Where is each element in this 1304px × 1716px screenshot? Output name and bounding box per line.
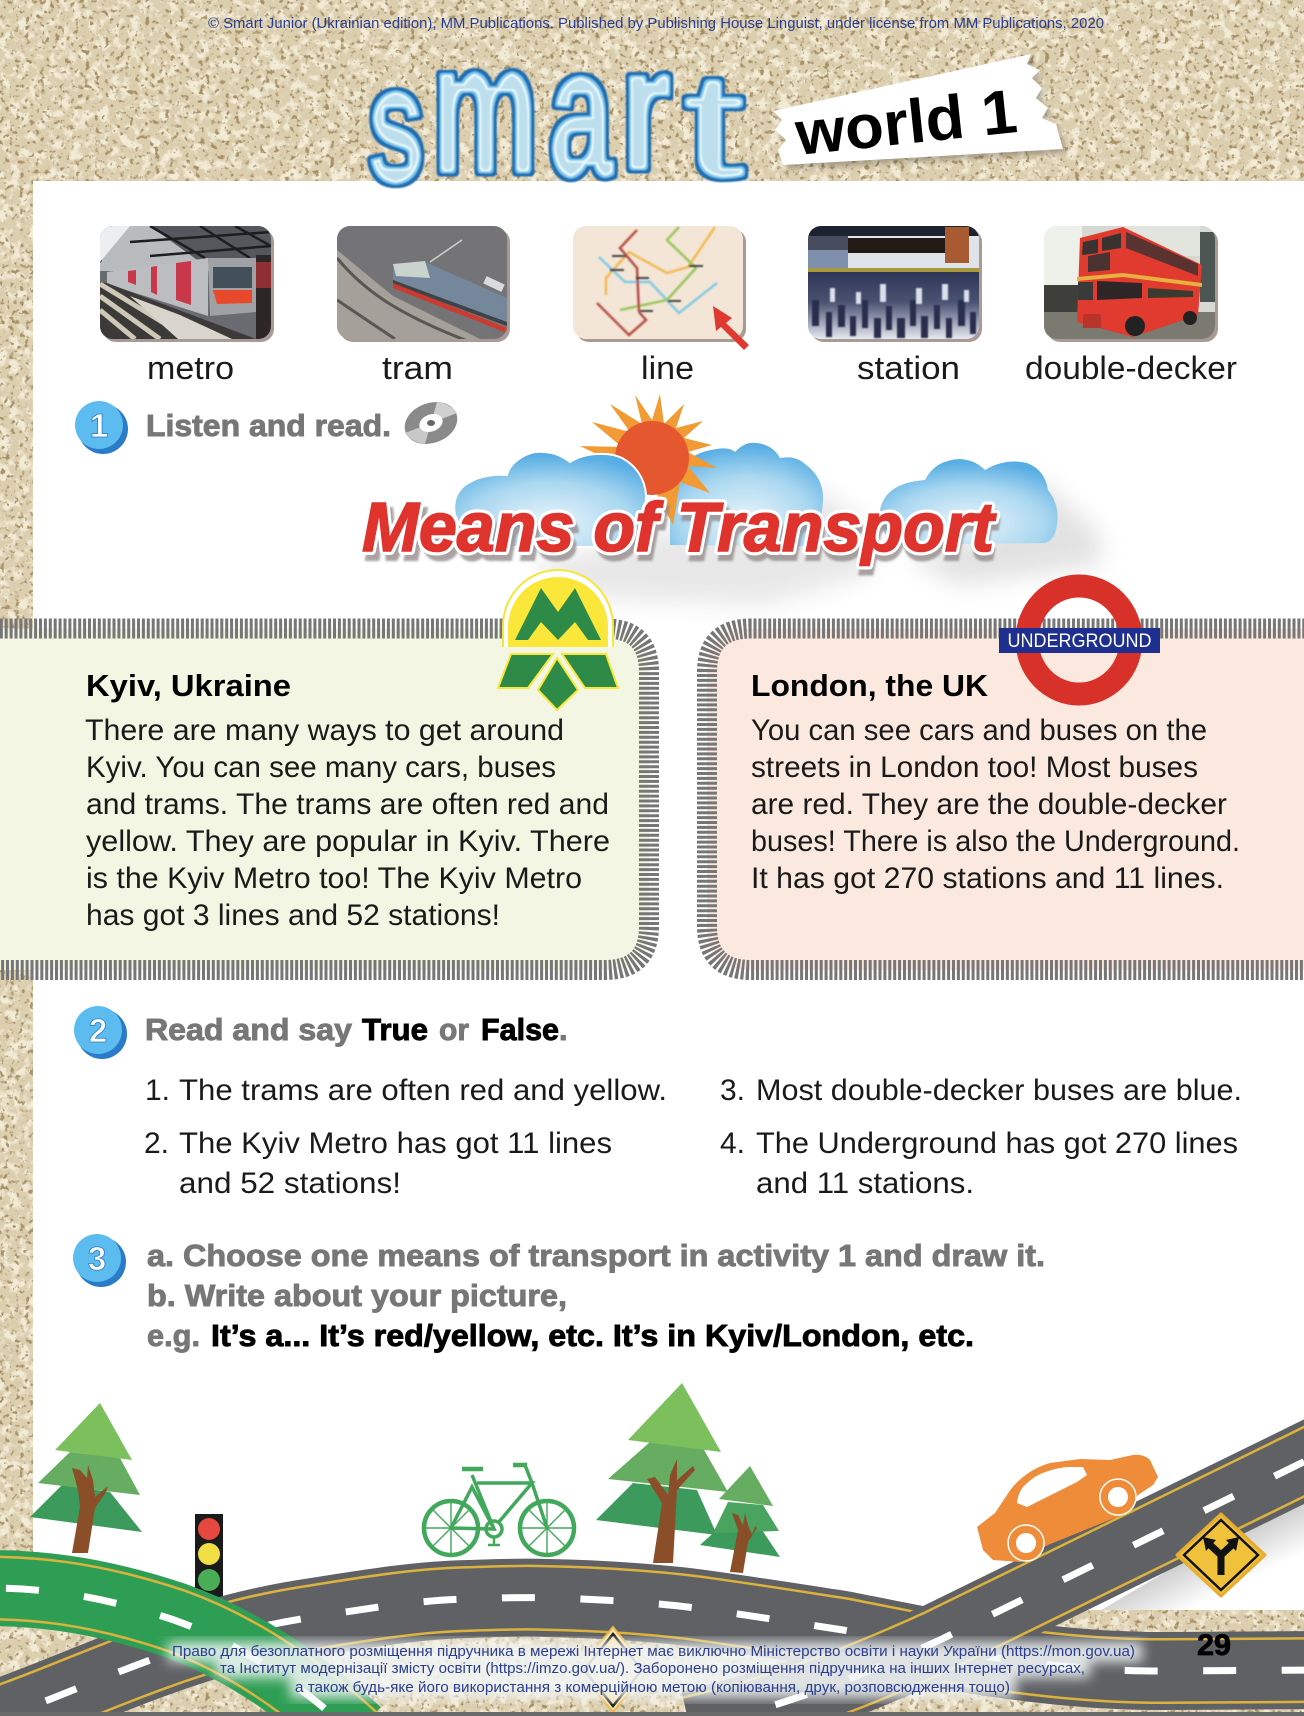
tree: centre — [596, 1383, 728, 1563]
activity 3 instructions: It’s a... It’s red/yellow, etc. It’s in Kyiv/London, etc. — [211, 1318, 974, 1353]
activity 1 instruction: Listen and read. — [146, 408, 391, 443]
true or false statements: The Kyiv Metro has got 11 lines — [179, 1127, 612, 1160]
copyright line: © Smart Junior (Ukrainian edition), MM Publications. Published by Publishing House Linguist, under license from MM Publications, 2020 — [208, 15, 1104, 32]
Kyiv body text — [85, 714, 610, 932]
icon: junction road sign — [1177, 1514, 1265, 1596]
sun rays — [580, 394, 717, 525]
activity 1 badge — [75, 401, 128, 454]
picture card: double-decker — [1044, 226, 1218, 342]
icon: bicycle — [424, 1465, 574, 1555]
activity 2 instruction — [145, 1012, 568, 1047]
bottom bar — [0, 1712, 1304, 1716]
activity 3 badge — [73, 1234, 126, 1287]
title: Means of Transport — [367, 495, 998, 573]
cloud: left — [454, 452, 646, 547]
picture card: line map with red arrow — [573, 226, 749, 350]
cork strip beneath the roads — [0, 1610, 1304, 1714]
tree: small — [700, 1466, 780, 1573]
true or false statements: and 11 stations. — [756, 1167, 974, 1200]
panel: Kyiv, Ukraine — [0, 628, 649, 970]
London heading: London, the UK — [751, 668, 989, 703]
road: grey diagonal — [690, 1449, 1304, 1716]
Kyiv body text: yellow. They are popular in Kyiv. There — [86, 825, 610, 858]
Kyiv body text: Kyiv. You can see many cars, buses — [86, 751, 556, 784]
logo: smart: s — [366, 30, 426, 218]
tree: left — [30, 1403, 142, 1553]
picture labels: station — [857, 350, 960, 386]
road: green — [0, 1588, 355, 1716]
true or false statements: The trams are often red and yellow. — [179, 1074, 667, 1107]
London body text: streets in London too! Most buses — [751, 751, 1198, 784]
page number: 29 — [1197, 1629, 1231, 1662]
copyright notice: Право для безоплатного розміщення підручника в мережі Інтернет має виключно Міністерство освіти і науки України (https://mon.gov.ua) — [172, 1643, 1135, 1660]
picture labels: tram — [382, 350, 453, 386]
true or false statements: 3. — [720, 1074, 745, 1107]
true or false statements: 2. — [144, 1127, 169, 1160]
heading illustration: sun and clouds — [454, 394, 1100, 605]
logo: smart: m — [431, 6, 539, 212]
icon: London Underground roundel: UNDERGROUND — [1008, 631, 1152, 652]
activity 3 instructions: a. Choose one means of transport in activity 1 and draw it. — [147, 1238, 1045, 1273]
activity 2 instruction: . — [559, 1012, 568, 1047]
London body text — [751, 714, 1240, 895]
cloud: middle — [670, 443, 823, 546]
icon: London Underground roundel — [999, 586, 1160, 694]
true or false statements: and 52 stations! — [179, 1167, 401, 1200]
road: grey hill — [0, 1598, 1304, 1716]
activity 2 instruction: False — [481, 1012, 559, 1047]
London body text: are red. They are the double-decker — [751, 788, 1227, 821]
activity 3 badge: 3 — [88, 1240, 106, 1277]
logo: smart: a — [548, 10, 615, 216]
true or false statements: 4. — [720, 1127, 745, 1160]
London body text: buses! There is also the Underground. — [751, 825, 1240, 858]
activity 3 instructions — [147, 1238, 1045, 1353]
copyright notice: а також будь-яке його використання з комерційною метою (копіювання, друк, розповсюдження тощо) — [295, 1679, 1010, 1696]
logo: smart: r — [620, 12, 672, 207]
icon: CD — [399, 395, 463, 451]
cloud: right — [880, 459, 1058, 545]
activity 2 badge: 2 — [89, 1012, 107, 1049]
true or false statements: The Underground has got 270 lines — [756, 1127, 1238, 1160]
picture labels: metro — [147, 350, 234, 386]
picture card: metro — [100, 226, 274, 342]
logo: smart — [366, 6, 744, 218]
activity 2 instruction: or — [439, 1012, 469, 1047]
activity 2 badge — [74, 1006, 127, 1059]
shadow below right road — [1098, 1490, 1304, 1612]
icon: lower road sign — [578, 1627, 648, 1712]
activity 2 instruction: True — [362, 1012, 428, 1047]
activity 2 instruction: Read and say — [145, 1012, 353, 1047]
sun disc — [615, 421, 689, 495]
logo: smart: t — [684, 41, 744, 209]
picture card: tram — [337, 226, 510, 342]
activity 1 badge: 1 — [90, 407, 108, 444]
activity 3 instructions: b. Write about your picture, — [147, 1278, 567, 1313]
true or false statements: Most double-decker buses are blue. — [756, 1074, 1242, 1107]
footer haze — [168, 1642, 1142, 1698]
picture labels — [147, 350, 1237, 386]
London body text: It has got 270 stations and 11 lines. — [751, 862, 1224, 895]
true or false statements — [144, 1074, 1242, 1200]
true or false statements: 1. — [145, 1074, 170, 1107]
Kyiv body text: There are many ways to get around — [85, 714, 564, 747]
activity 3 instructions: e.g. — [147, 1318, 200, 1353]
icon: Kyiv Metro logo — [498, 570, 618, 710]
icon: orange car — [977, 1455, 1158, 1562]
title: Means of Transport — [362, 488, 997, 566]
torn tape: world 1: world 1 — [791, 77, 1020, 169]
London body text: You can see cars and buses on the — [751, 714, 1207, 747]
copyright notice: та Інститут модернізації змісту освіти (https://imzo.gov.ua/). Заборонено розміщення підручника на інших Інтернет ресурсах, — [220, 1660, 1085, 1677]
Kyiv heading: Kyiv, Ukraine — [86, 668, 291, 703]
title: Means of Transport — [362, 488, 997, 566]
picture labels: double-decker — [1025, 350, 1237, 386]
icon: traffic light — [195, 1514, 223, 1598]
Kyiv body text: and trams. The trams are often red and — [86, 788, 609, 821]
picture labels: line — [641, 350, 694, 386]
Kyiv body text: has got 3 lines and 52 stations! — [86, 899, 500, 932]
picture card: station — [808, 226, 982, 342]
copyright notice — [172, 1643, 1135, 1696]
Kyiv body text: is the Kyiv Metro too! The Kyiv Metro — [86, 862, 582, 895]
torn tape: world 1 — [773, 54, 1066, 169]
panel: London, the UK — [707, 628, 1304, 970]
